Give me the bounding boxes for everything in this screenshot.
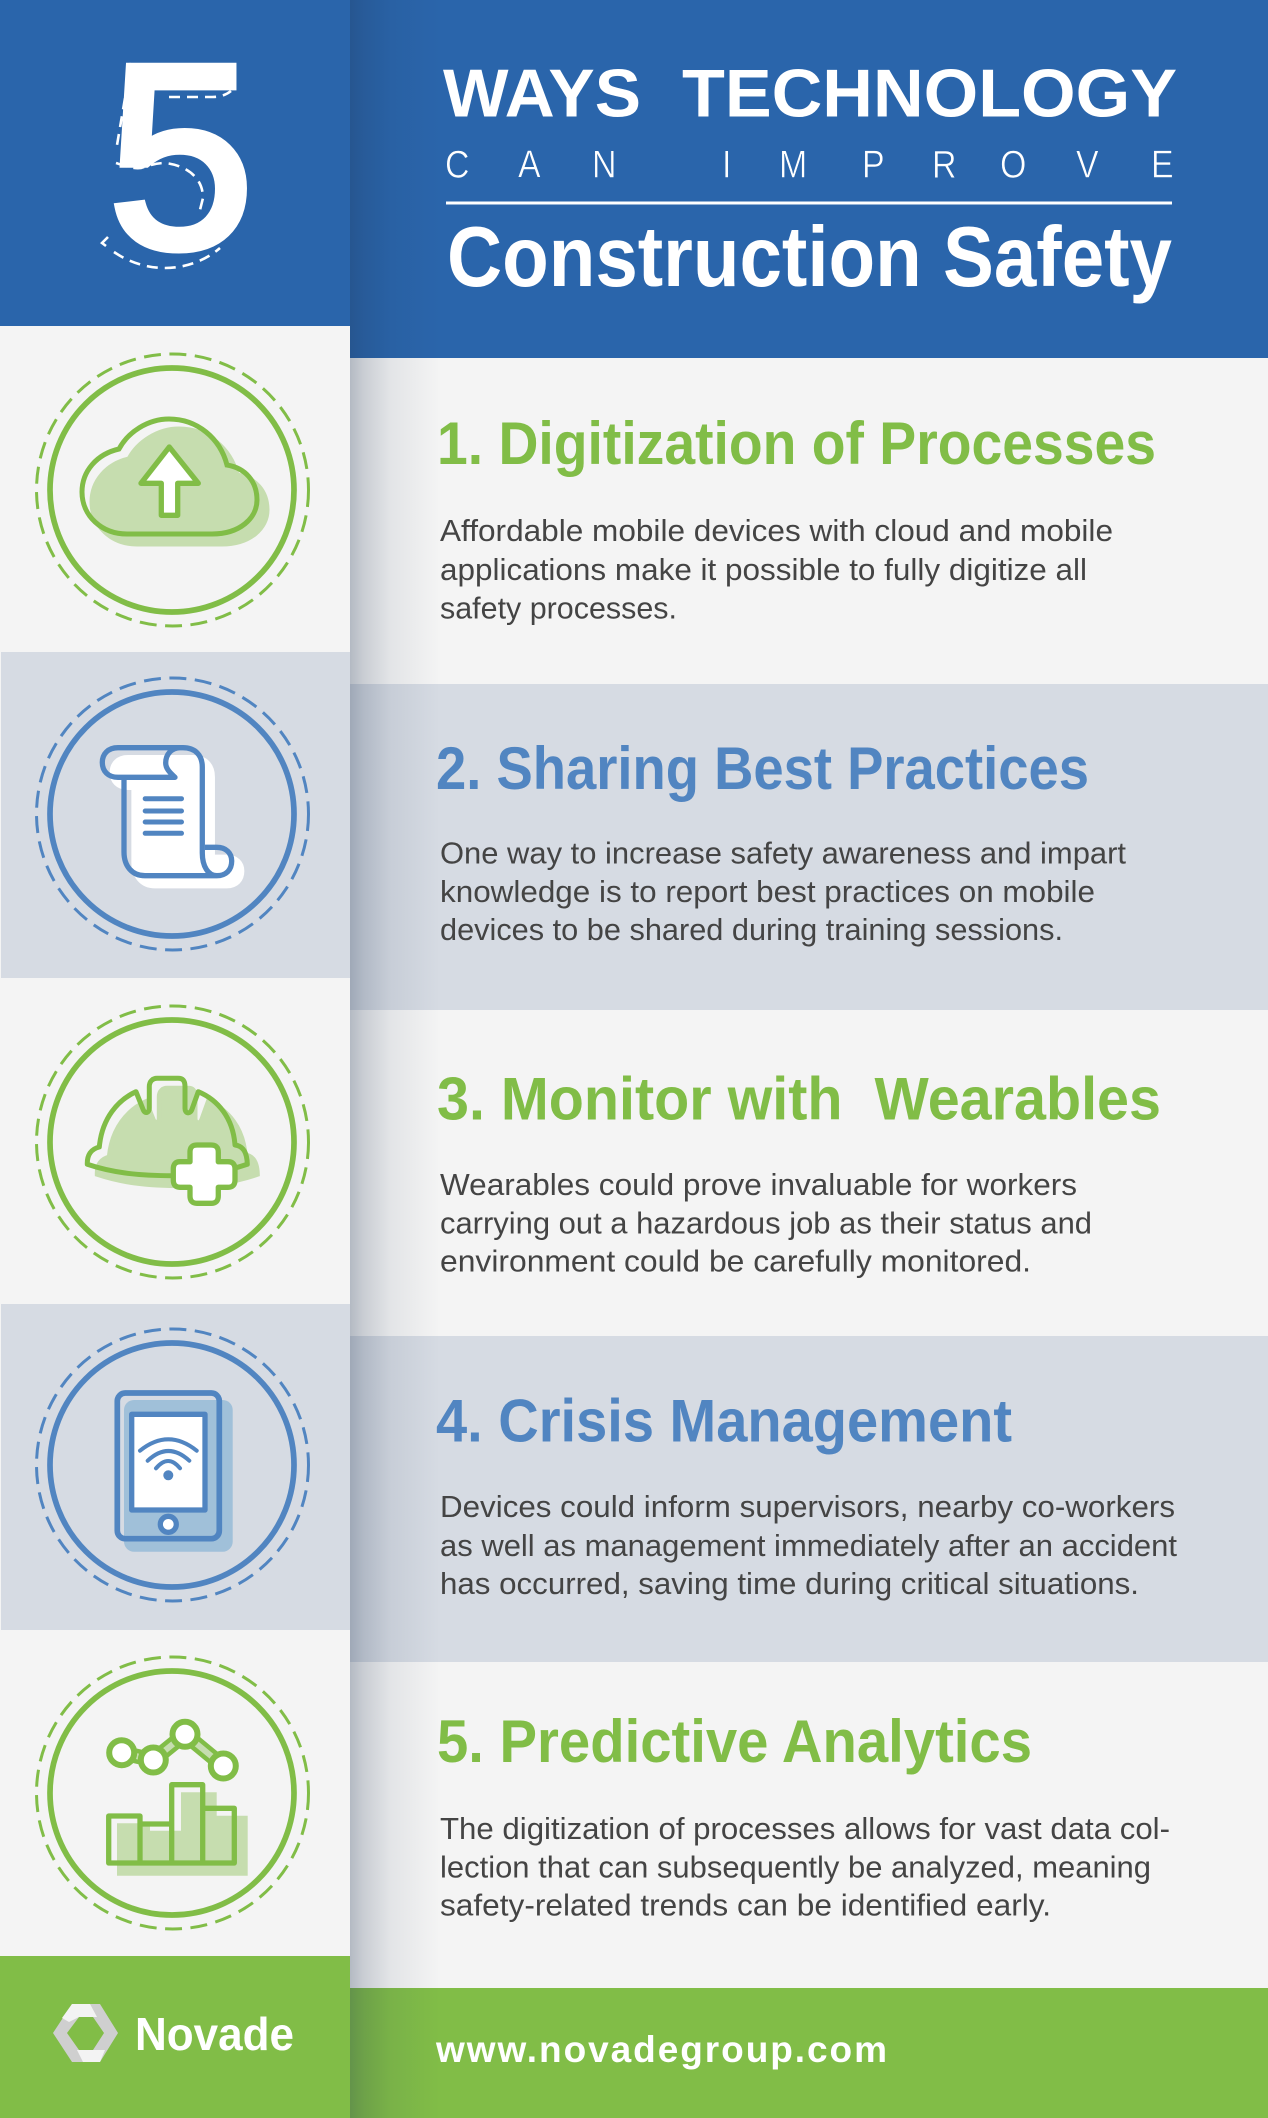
icon: hard hat with medical cross in ring	[36, 1006, 308, 1278]
heading 4: 4. Crisis Management	[436, 1388, 1012, 1454]
body 4: as well as management immediately after an accident	[440, 1529, 1178, 1563]
panel: section 3 text	[437, 1066, 1161, 1278]
body 5: lection that can subsequently be analyzed, meaning	[440, 1850, 1151, 1884]
heading 2: 2. Sharing Best Practices	[436, 735, 1089, 802]
body 1	[440, 514, 1113, 626]
panel: left column background	[0, 0, 350, 2118]
panel: section 4 text	[436, 1388, 1178, 1601]
body 1: safety processes.	[440, 592, 677, 626]
body 4	[440, 1490, 1178, 1601]
panel: section 2 text	[436, 735, 1127, 947]
website url: www.novadegroup.com	[435, 2029, 887, 2070]
icon: scroll document in ring	[36, 678, 308, 950]
heading 1: 1. Digitization of Processes	[437, 410, 1156, 477]
body 3: Wearables could prove invaluable for workers	[440, 1168, 1077, 1202]
panel: section 5 text	[437, 1708, 1170, 1922]
body 3: environment could be carefully monitored.	[440, 1244, 1031, 1278]
title line: ways technology: WAYS	[443, 56, 641, 132]
icon: tablet with wifi in ring	[36, 1329, 308, 1601]
icon: hexagon logo mark	[53, 2004, 118, 2062]
body 3	[440, 1168, 1092, 1278]
title line: ways technology: TECHNOLOGY	[682, 56, 1177, 132]
body 1: Affordable mobile devices with cloud and mobile	[440, 514, 1113, 548]
panel: right column background	[350, 0, 1268, 2118]
body 2: knowledge is to report best practices on mobile	[440, 875, 1095, 909]
title line: construction safety: Construction Safety	[447, 210, 1172, 305]
body 4: has occurred, saving time during critical situations.	[440, 1567, 1139, 1601]
logo wordmark: Novade	[135, 2008, 294, 2060]
body 5: The digitization of processes allows for vast data col-	[440, 1812, 1170, 1846]
body 2: One way to increase safety awareness and impart	[440, 836, 1127, 870]
body 3: carrying out a hazardous job as their status and	[440, 1206, 1092, 1240]
icon: line and bar analytics in ring	[36, 1657, 308, 1929]
title	[443, 56, 1177, 305]
body 5: safety-related trends can be identified early.	[440, 1888, 1051, 1922]
title line: ways technology	[443, 56, 1177, 132]
body 1: applications make it possible to fully digitize all	[440, 553, 1087, 587]
heading 5: 5. Predictive Analytics	[437, 1708, 1032, 1775]
body 4: Devices could inform supervisors, nearby co-workers	[440, 1490, 1175, 1524]
title rule	[446, 202, 1172, 204]
big number 5 with stitched outline: 5	[108, 10, 254, 303]
body 2: devices to be shared during training sessions.	[440, 913, 1063, 947]
heading 3: 3. Monitor with Wearables	[437, 1066, 1161, 1132]
body 5	[440, 1812, 1170, 1922]
logo: Novade	[53, 2004, 294, 2062]
panel: section 1 text	[437, 410, 1156, 626]
title line: can improve: CANIMPROVE	[445, 142, 1174, 186]
icon: cloud upload in ring	[36, 354, 308, 626]
body 2	[440, 836, 1127, 947]
